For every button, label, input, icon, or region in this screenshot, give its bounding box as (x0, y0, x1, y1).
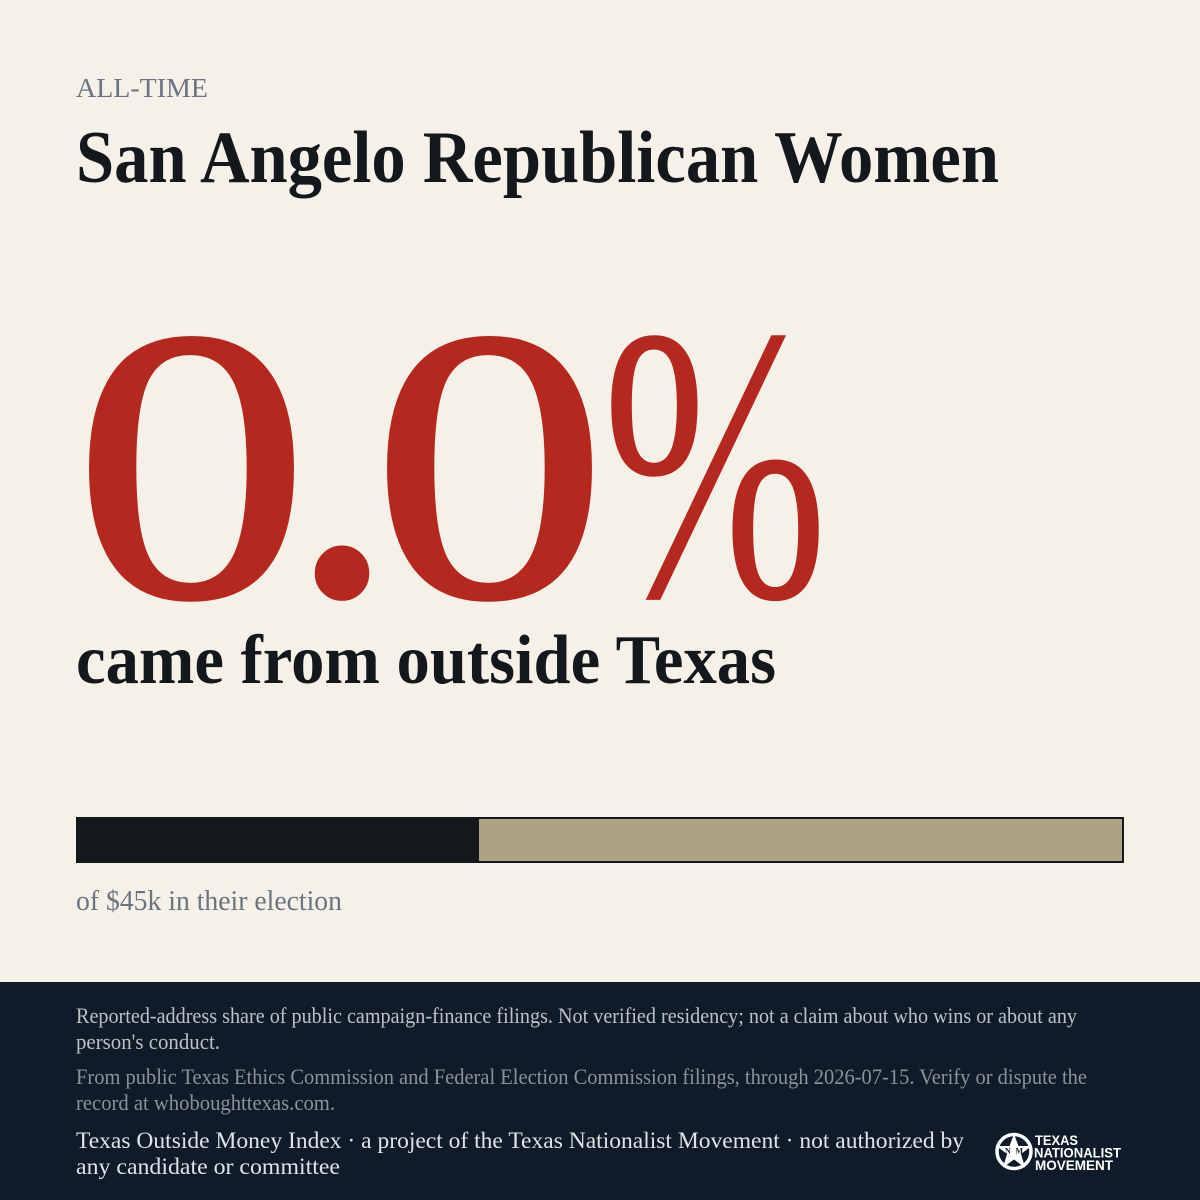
big percentage: 0 (74, 250, 310, 680)
big percentage: % (602, 247, 828, 681)
logo wordmark: TEXAS (1035, 1133, 1078, 1148)
attribution text: Texas Outside Money Index · a project of the Texas Nationalist Movement · not authorized by (76, 1128, 964, 1153)
logo wordmark (1034, 1133, 1122, 1173)
icon: star emblem: N (1005, 1146, 1011, 1156)
source text: record at whoboughttexas.com. (76, 1090, 335, 1115)
logo: Texas Nationalist Movement (996, 1133, 1122, 1173)
icon: star emblem: M (1016, 1146, 1024, 1156)
attribution text: any candidate or committee (76, 1154, 340, 1179)
source text: From public Texas Ethics Commission and Federal Election Commission filings, through 2026-07-15. Verify or dispute the (76, 1064, 1087, 1089)
progress bar (76, 817, 1124, 863)
icon: star emblem (996, 1134, 1032, 1168)
big percentage (74, 247, 828, 681)
bar caption: of $45k in their election (76, 885, 342, 917)
source text (76, 1064, 1087, 1115)
eyebrow label: ALL-TIME (76, 73, 208, 103)
big percentage: 0 (372, 250, 608, 680)
big percentage: . (300, 292, 384, 670)
disclaimer text (76, 1003, 1077, 1054)
footer panel (0, 982, 1200, 1200)
attribution text (76, 1128, 964, 1179)
logo wordmark: NATIONALIST (1034, 1146, 1122, 1160)
disclaimer text: person's conduct. (76, 1029, 220, 1054)
title: San Angelo Republican Women (76, 117, 999, 199)
disclaimer text: Reported-address share of public campaign-finance filings. Not verified residency; not a claim about who wins or about any (76, 1003, 1077, 1028)
subheading: came from outside Texas (76, 622, 776, 699)
logo wordmark: MOVEMENT (1035, 1158, 1114, 1173)
